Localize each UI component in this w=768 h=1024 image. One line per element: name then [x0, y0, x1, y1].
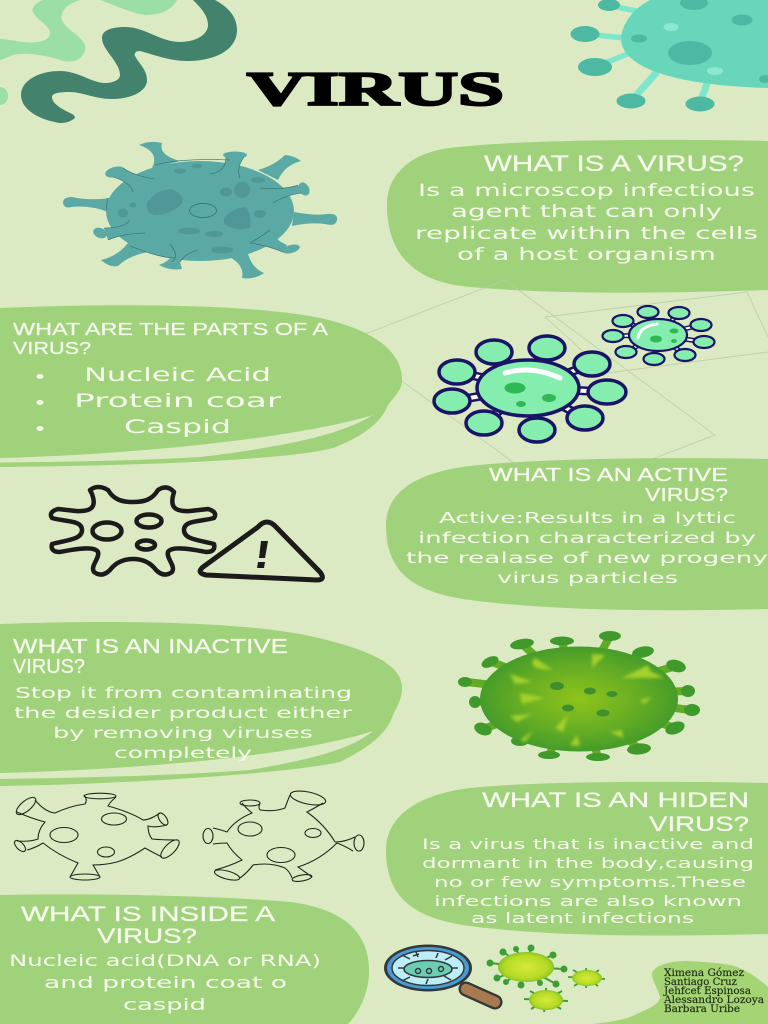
text: hidden definition: infections are also known [434, 894, 742, 910]
heading: parts: WHAT ARE THE PARTS OF A [13, 319, 328, 339]
icon: navy outlined virus small [602, 306, 714, 365]
heading: inactive virus: VIRUS? [13, 656, 85, 678]
list: virus parts: Protein coar [74, 390, 281, 412]
icon: yellow-green virus large [486, 944, 568, 988]
text: authors [663, 968, 764, 1015]
text: active definition: Active:Results in a lyttic [439, 509, 736, 527]
heading: inside [21, 903, 275, 948]
text: virus definition: Is a microscop infectious [418, 181, 755, 200]
text: authors: Barbara Uribe [664, 1004, 740, 1015]
text: active definition: virus particles [497, 569, 678, 587]
text: inactive definition: Stop it from contaminating [15, 684, 352, 702]
title: VIRUS [247, 63, 504, 116]
text: virus definition: of a host organism [457, 245, 716, 264]
text: hidden definition: dormant in the body,causing [422, 856, 754, 872]
text: inactive definition: the desider product either [14, 704, 353, 722]
icon: yellow-green virus medium [524, 988, 568, 1012]
text: inside definition: and protein coat o [44, 973, 287, 992]
text: active definition: infection characterized by [418, 529, 756, 547]
text: inside definition: Nucleic acid(DNA or RNA) [9, 951, 321, 970]
text: virus definition: agent that can only [451, 202, 722, 221]
text: hidden definition: Is a virus that is inactive and [422, 837, 754, 853]
heading: parts [13, 319, 328, 358]
icon: magnifying glass [384, 944, 495, 1002]
panel: hidden virus [386, 782, 768, 936]
text: authors: Ximena Gómez [664, 968, 744, 979]
squiggle: dark green [21, 0, 237, 123]
icon: green corona virus [458, 631, 700, 761]
text: inactive definition: completely [114, 744, 252, 762]
text: virus definition: replicate within the cells [415, 224, 758, 243]
icon: line virus right [203, 788, 364, 883]
text: hidden definition: as latent infections [471, 911, 694, 927]
list: virus parts: Caspid [124, 416, 231, 438]
heading: inside: WHAT IS INSIDE A [21, 903, 275, 926]
text: inactive definition: by removing viruses [53, 724, 313, 742]
heading: inactive virus: WHAT IS AN INACTIVE [13, 636, 288, 658]
text: hidden definition: no or few symptoms.These [434, 875, 746, 891]
text: active definition: the realase of new progeny [406, 549, 768, 567]
heading: active virus: WHAT IS AN ACTIVE [489, 464, 728, 485]
icon: virus outline with warning triangle [51, 487, 322, 580]
panel: what is a virus [387, 140, 768, 293]
heading: active virus: VIRUS? [645, 484, 728, 505]
panel: parts of a virus [0, 305, 402, 467]
heading: what is a virus: WHAT IS A VIRUS? [484, 151, 744, 176]
text: inside definition [9, 951, 321, 1014]
text: hidden definition [422, 837, 754, 927]
heading: inactive virus [13, 636, 288, 678]
text: virus definition [415, 181, 758, 264]
panel: active virus [386, 458, 768, 610]
panel: credits [593, 961, 768, 1024]
heading: hidden virus: WHAT IS AN HIDEN [482, 789, 749, 812]
text: authors: Alessandro Lozoya [663, 995, 764, 1006]
heading: parts: VIRUS? [13, 338, 91, 358]
icon: line virus left [13, 793, 182, 880]
icon: yellow-green virus small [568, 968, 605, 988]
text: authors: Jehfcet Espinosa [663, 986, 751, 997]
heading: active virus [489, 464, 728, 505]
text: authors: Santiago Cruz [664, 977, 737, 988]
panel: inside a virus [0, 894, 369, 1024]
icon: teal virus top right [570, 0, 768, 112]
list: virus parts: Nucleic Acid [84, 364, 271, 386]
text: active definition [406, 509, 768, 587]
panel: inactive virus [0, 622, 402, 786]
heading: hidden virus: VIRUS? [649, 813, 749, 836]
icon: navy outlined virus large [434, 336, 626, 442]
list: virus parts [36, 364, 281, 438]
heading: hidden virus [482, 789, 749, 836]
heading: inside: VIRUS? [97, 925, 197, 948]
text: inactive definition [14, 684, 353, 762]
faint polygons [347, 280, 768, 495]
squiggle: light green [0, 0, 177, 105]
icon: blue-green virus [63, 142, 337, 278]
text: inside definition: caspid [123, 995, 206, 1014]
